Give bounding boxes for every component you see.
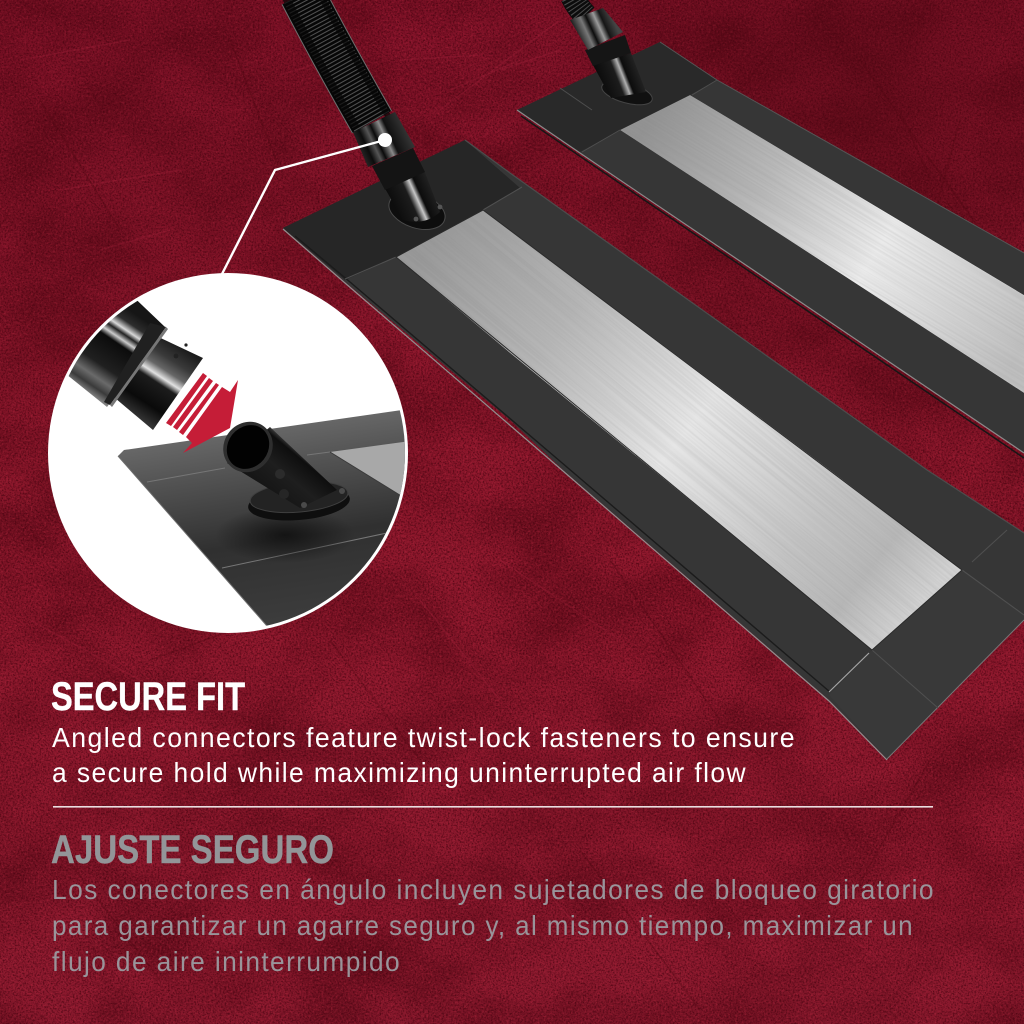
red insertion arrow	[166, 373, 238, 453]
back connector pipe	[593, 53, 646, 98]
back connector base	[599, 77, 655, 109]
back hose and connector	[570, 0, 655, 109]
Spanish description	[52, 874, 935, 977]
main hose and connector	[284, 0, 450, 236]
angled socket connector	[213, 412, 351, 524]
main mat head panel	[283, 140, 520, 280]
main mat	[282, 140, 1024, 760]
back hose	[572, 0, 586, 16]
main connector bolts	[414, 205, 442, 221]
callout pointer line	[222, 133, 392, 274]
main mat foot panel	[829, 570, 1024, 759]
main mat body	[283, 140, 1024, 759]
English description: a secure hold while maximizing uninterrupted air flow	[52, 757, 747, 788]
main mat steel plate	[397, 210, 962, 650]
main hose	[284, 0, 388, 128]
main connector lower collar	[372, 148, 425, 190]
Spanish description: para garantizar un agarre seguro y, al mismo tiempo, maximizar un	[52, 910, 914, 941]
base shadow	[232, 516, 345, 559]
white circle	[48, 273, 408, 633]
hose end connector	[68, 300, 203, 430]
main connector pipe	[383, 170, 440, 222]
mat plate detail	[118, 410, 410, 640]
Spanish description: Los conectores en ángulo incluyen sujetadores de bloqueo giratorio	[52, 874, 935, 905]
English description: Angled connectors feature twist-lock fasteners to ensure	[52, 722, 796, 753]
steel inset	[330, 442, 405, 495]
back mat body	[517, 42, 1024, 453]
English description	[52, 722, 796, 788]
Spanish heading: AJUSTE SEGURO	[51, 828, 334, 872]
main connector base	[384, 186, 450, 236]
back mat steel plate	[620, 95, 1024, 393]
back connector lower collar	[585, 35, 631, 66]
English heading: SECURE FIT	[51, 675, 245, 719]
back mat head panel	[517, 42, 717, 152]
back mat	[517, 0, 1024, 458]
back connector collar	[570, 8, 623, 50]
detail circle callout	[30, 265, 410, 640]
Spanish description: flujo de aire ininterrumpido	[52, 946, 401, 977]
main connector collar	[353, 112, 415, 167]
